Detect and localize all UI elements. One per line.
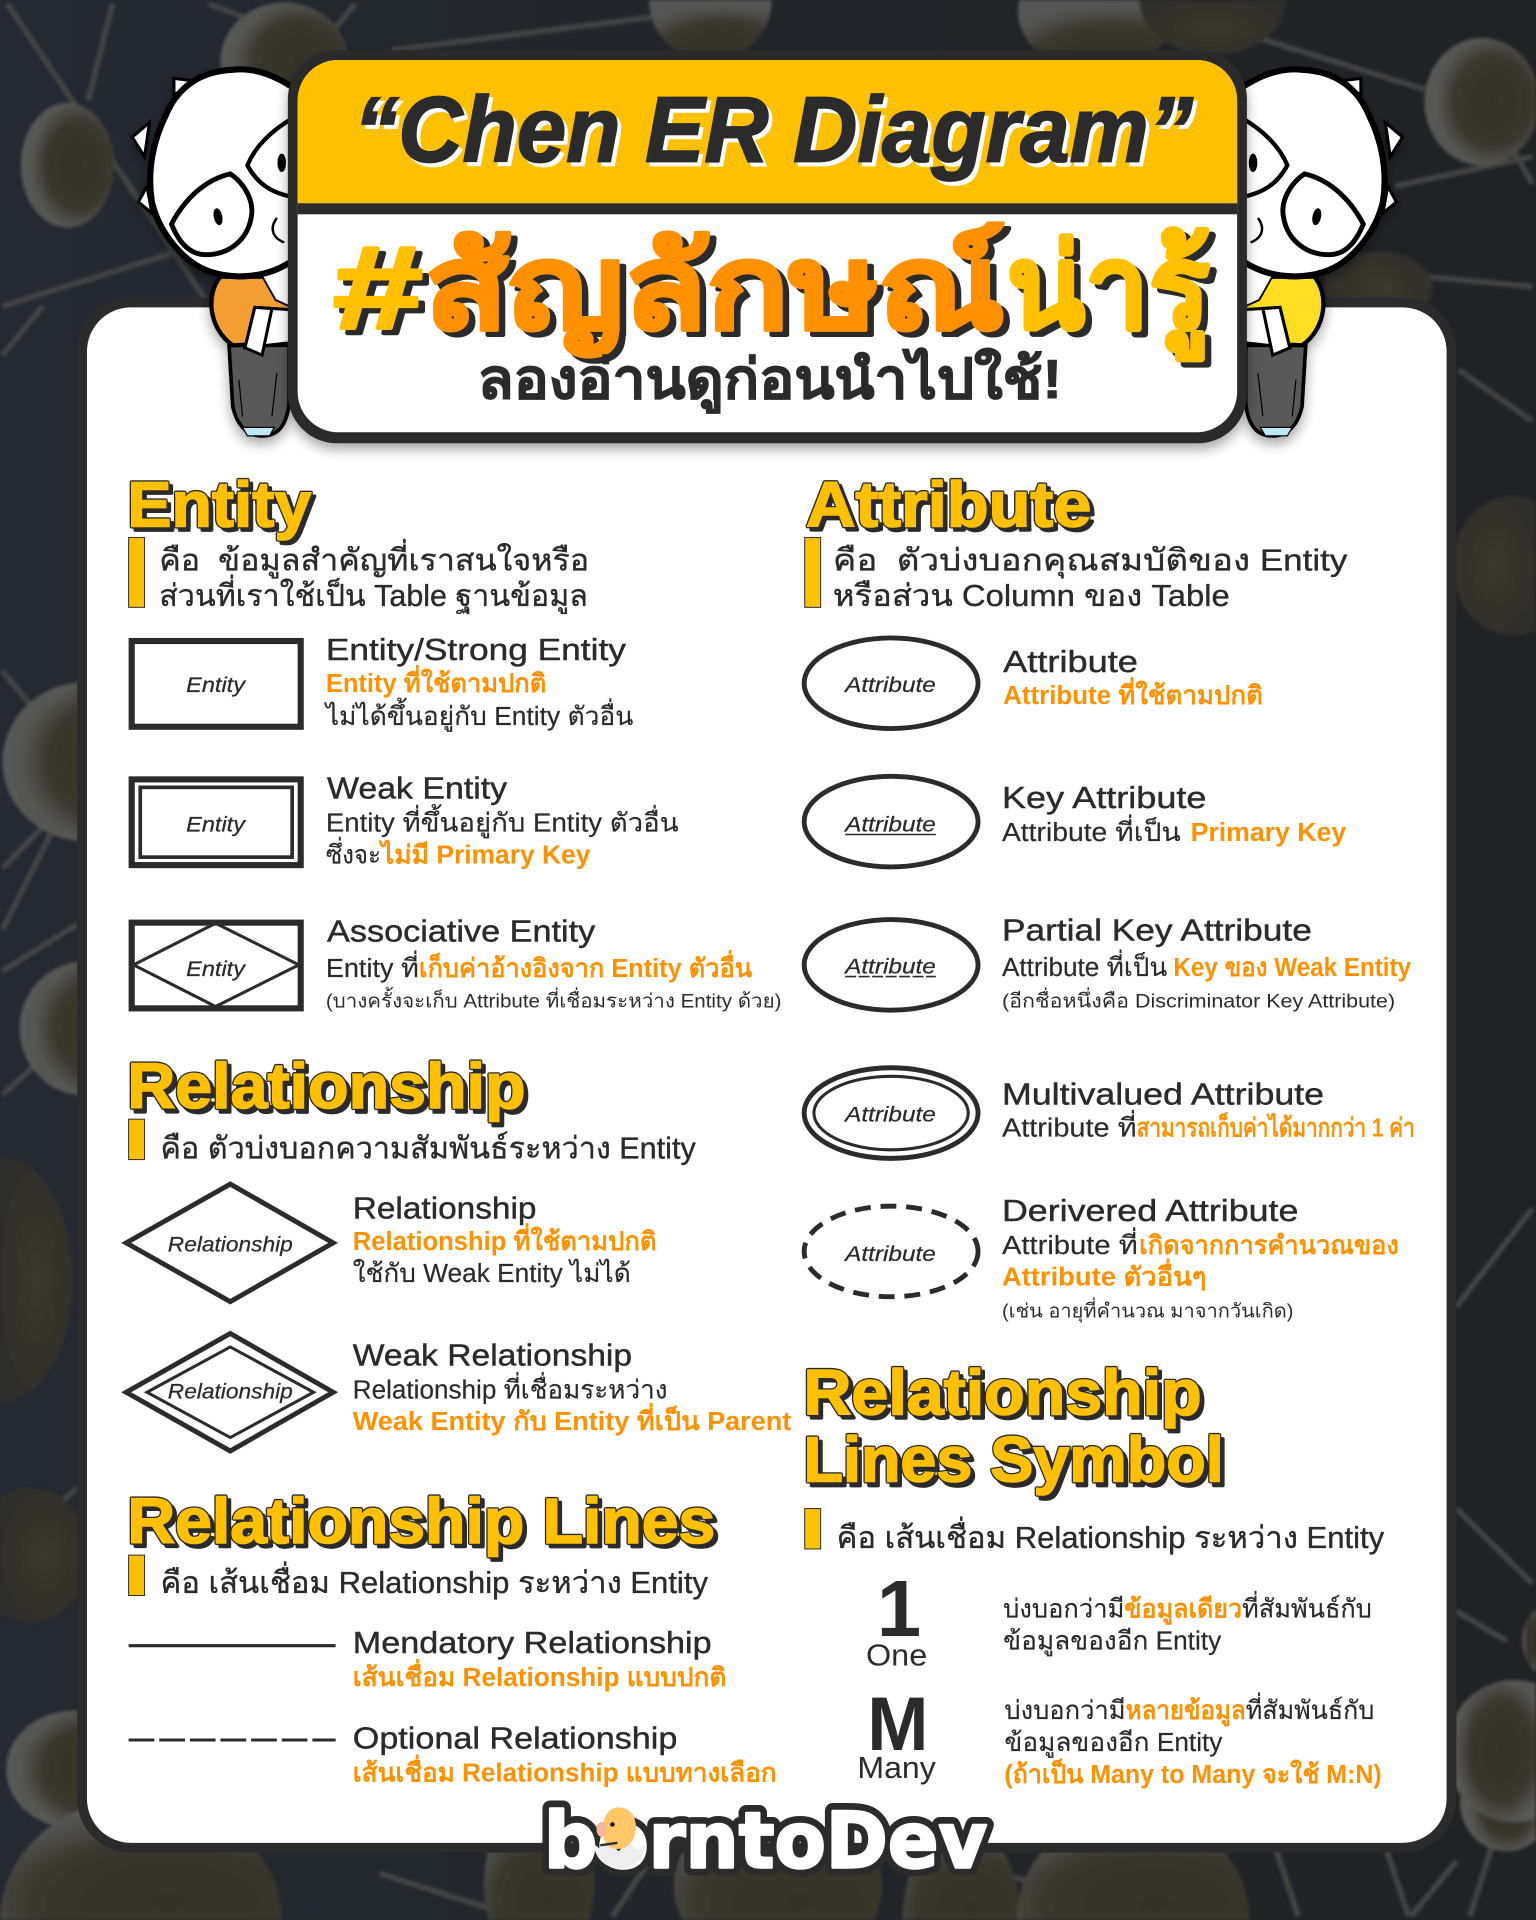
panel: Relationship: [126, 1051, 792, 1451]
accent bar: [129, 1555, 145, 1596]
Associative entity text: [326, 915, 781, 1013]
One text: ข้อมูลของอีก Entity: [1003, 1627, 1221, 1656]
Weak relationship text: [353, 1338, 792, 1436]
heading: symbols to know: สัญลักษณ์: [431, 227, 1011, 362]
Partial key text: (อีกชื่อหนึ่งคือ Discriminator Key Attribute): [1002, 988, 1395, 1013]
Mandatory text: Mendatory Relationship: [353, 1626, 712, 1660]
symbol: one: One: [866, 1638, 927, 1672]
Relationship text: [353, 1191, 657, 1288]
heading: Relationship Lines: Relationship Lines: [131, 1490, 719, 1561]
heading: Relationship Lines: Relationship Lines: [127, 1486, 715, 1557]
Associative entity text: Entity ที่: [326, 950, 419, 983]
heading: Relationship: Relationship: [127, 1051, 525, 1122]
Optional text: Optional Relationship: [353, 1722, 677, 1756]
heading: Relationship: Relationship: [127, 1051, 525, 1122]
accent bar: [129, 538, 145, 607]
symbol: multivalued attribute double ellipse: Attribute: [843, 1104, 936, 1127]
Relationship description: คือ ตัวบ่งบอกความสัมพันธ์ระหว่าง Entity: [160, 1131, 696, 1165]
Partial key text: Attribute ที่เป็น: [1002, 949, 1167, 982]
symbol: many: Many: [857, 1751, 937, 1785]
title: Chen ER Diagram: “Chen ER Diagram”: [354, 78, 1193, 182]
Relationship text: Relationship: [353, 1191, 536, 1225]
Mandatory text: [353, 1626, 726, 1692]
Weak relationship text: Weak Relationship: [353, 1338, 632, 1372]
Many text: บ่งบอกว่ามี: [1004, 1697, 1126, 1725]
symbol: many: [857, 1682, 937, 1785]
heading: Entity: Entity: [127, 470, 312, 541]
heading: symbols to know: น่ารู้: [1007, 222, 1210, 361]
symbol: attribute ellipse: [804, 638, 978, 729]
symbol: relationship diamond: [126, 1184, 333, 1302]
Many text: ข้อมูลของอีก Entity: [1004, 1729, 1223, 1758]
panel: Entity: [127, 470, 781, 1013]
Attribute description: คือ ตัวบ่งบอกคุณสมบัติของ Entity: [833, 544, 1348, 580]
Strong entity text: Entity ที่ใช้ตามปกติ: [326, 665, 546, 698]
Key attribute text: Attribute ที่เป็น: [1002, 814, 1181, 847]
One text: [1003, 1591, 1372, 1656]
Symbol description: คือ เส้นเชื่อม Relationship ระหว่าง Entity: [837, 1516, 1385, 1555]
Relationship text: ใช้กับ Weak Entity ไม่ได้: [353, 1259, 631, 1288]
One text: ข้อมูลเดียว: [1124, 1595, 1242, 1626]
Attribute description: [833, 544, 1348, 613]
Partial key text: Partial Key Attribute: [1002, 913, 1312, 947]
Associative entity text: Associative Entity: [327, 915, 596, 949]
Many text: (ถ้าเป็น Many to Many จะใช้ M:N): [1004, 1758, 1382, 1789]
symbol: weak relationship double diamond: [126, 1333, 333, 1451]
heading: Attribute: Attribute: [810, 473, 1095, 544]
symbol: key attribute ellipse: Attribute: [843, 813, 936, 836]
symbol: derived attribute dashed ellipse: Attribute: [843, 1243, 936, 1266]
Weak relationship text: Relationship ที่เชื่อมระหว่าง: [353, 1371, 668, 1404]
icon: chick in egg: [592, 1807, 646, 1885]
Derived text: Derivered Attribute: [1002, 1194, 1298, 1228]
panel: Relationship Lines: [127, 1486, 777, 1788]
symbol: solid line: [129, 1644, 336, 1647]
Entity description: ส่วนที่เราใช้เป็น Table ฐานข้อมูล: [159, 574, 588, 614]
Many text: ที่สัมพันธ์กับ: [1246, 1692, 1374, 1725]
Relationship text: Relationship ที่ใช้ตามปกติ: [353, 1223, 657, 1256]
Optional text: [353, 1722, 777, 1788]
heading: symbols to know: น่ารู้: [1013, 227, 1216, 366]
Derived text: (เช่น อายุที่คำนวณ มาจากวันเกิด): [1002, 1298, 1293, 1324]
accent bar: [129, 1119, 145, 1160]
Key attribute text: [1002, 781, 1347, 847]
heading: Attribute: Attribute: [806, 470, 1091, 541]
Weak relationship text: Weak Entity กับ Entity ที่เป็น Parent: [353, 1403, 792, 1436]
panel: Attribute: [804, 470, 1415, 1324]
Attribute description: หรือส่วน Column ของ Table: [833, 579, 1230, 613]
heading: symbols to know: #: [339, 227, 429, 358]
Mandatory text: เส้นเชื่อม Relationship แบบปกติ: [353, 1659, 726, 1692]
heading: symbols to know: #: [333, 222, 423, 353]
heading: Entity: Entity: [131, 473, 315, 544]
Weak entity text: ไม่มี Primary Key: [378, 839, 591, 869]
heading: Relationship Lines Symbol: Relationship: [804, 1357, 1202, 1428]
panel: title header: [288, 50, 1247, 443]
Derived text: [1002, 1194, 1399, 1324]
symbol: strong entity rectangle: [132, 641, 301, 727]
symbol: attribute ellipse: Attribute: [843, 674, 936, 697]
symbol: weak entity double rectangle: Entity: [186, 813, 247, 836]
Multivalued text: สามารถเก็บค่าได้มากกว่า 1 ค่า: [1137, 1111, 1415, 1142]
One text: ที่สัมพันธ์กับ: [1242, 1591, 1372, 1624]
Associative entity text: (บางครั้งจะเก็บ Attribute ที่เชื่อมระหว่าง Entity ด้วย): [326, 987, 781, 1013]
symbol: derived attribute dashed ellipse: [804, 1206, 978, 1297]
panel: Relationship Lines Symbol: [804, 1357, 1385, 1789]
heading: Relationship Lines Symbol: Relationship: [807, 1361, 1205, 1432]
subtitle: ลองอ่านดูก่อนนำไปใช้!: [478, 347, 1062, 414]
Weak entity text: [326, 771, 679, 869]
Derived text: Attribute ตัวอื่นๆ: [1002, 1259, 1207, 1292]
symbol: associative entity: [132, 923, 301, 1008]
Derived text: เกิดจากการคำนวณของ: [1139, 1232, 1399, 1260]
heading: Attribute: Attribute: [806, 470, 1091, 541]
Weak entity text: Weak Entity: [327, 771, 508, 805]
logo: borntoDev: borntoDev: [544, 1796, 987, 1886]
Partial key text: Key ของ Weak Entity: [1173, 954, 1412, 982]
symbol: partial key attribute ellipse: [804, 920, 978, 1010]
One text: บ่งบอกว่ามี: [1003, 1596, 1124, 1624]
Many text: [1004, 1692, 1382, 1789]
heading: symbols to know: สัญลักษณ์: [425, 222, 1004, 357]
Associative entity text: เก็บค่าอ้างอิงจาก Entity ตัวอื่น: [419, 950, 752, 983]
symbol: weak entity double rectangle: [132, 779, 301, 865]
Attribute text: Attribute: [1003, 645, 1138, 679]
heading: Relationship Lines Symbol: [804, 1357, 1227, 1499]
accent bar: [805, 1509, 821, 1549]
Weak entity text: Entity ที่ขึ้นอยู่กับ Entity ตัวอื่น: [326, 804, 679, 838]
Entity description: คือ ข้อมูลสำคัญที่เราสนใจหรือ: [159, 539, 589, 579]
heading: symbols to know: [333, 222, 1216, 366]
Multivalued text: Multivalued Attribute: [1002, 1077, 1324, 1111]
symbol: one: [866, 1564, 927, 1672]
symbol: multivalued attribute double ellipse: [804, 1068, 978, 1158]
symbol: dashed line: [129, 1739, 336, 1741]
Many text: หลายข้อมูล: [1126, 1697, 1246, 1727]
symbol: partial key attribute ellipse: Attribute: [843, 955, 936, 978]
heading: Relationship Lines: Relationship Lines: [127, 1486, 715, 1557]
heading: Relationship: Relationship: [131, 1055, 529, 1126]
heading: Relationship Lines Symbol: Relationship: [804, 1357, 1202, 1428]
heading: Relationship Lines Symbol: Lines Symbol: [804, 1425, 1224, 1496]
Lines description: คือ เส้นเชื่อม Relationship ระหว่าง Entity: [160, 1561, 709, 1600]
Entity description: [159, 539, 589, 614]
accent bar: [805, 538, 821, 607]
Multivalued text: Attribute ที่: [1002, 1109, 1137, 1142]
mascot: right character peeking: [1233, 69, 1402, 436]
Strong entity text: Entity/Strong Entity: [326, 633, 627, 667]
Optional text: เส้นเชื่อม Relationship แบบทางเลือก: [353, 1755, 777, 1788]
Partial key text: [1002, 913, 1412, 1013]
symbol: weak relationship double diamond: Relationship: [168, 1380, 293, 1403]
heading: Entity: Entity: [127, 470, 312, 541]
heading: Relationship Lines Symbol: Lines Symbol: [807, 1428, 1227, 1499]
Key attribute text: Primary Key: [1191, 819, 1347, 847]
symbol: key attribute ellipse: [804, 776, 978, 867]
main white card: [77, 298, 1456, 1853]
Attribute text: Attribute ที่ใช้ตามปกติ: [1003, 677, 1263, 710]
Strong entity text: [324, 633, 633, 732]
symbol: associative entity: Entity: [186, 958, 247, 981]
heading: Relationship Lines Symbol: Lines Symbol: [804, 1425, 1224, 1496]
symbol: strong entity rectangle: Entity: [186, 674, 247, 697]
symbol: relationship diamond: Relationship: [168, 1233, 293, 1256]
Multivalued text: [1002, 1077, 1415, 1142]
Weak entity text: ซึ่งจะ: [326, 836, 381, 869]
title: Chen ER Diagram: “Chen ER Diagram”: [358, 81, 1197, 185]
Derived text: Attribute ที่: [1002, 1227, 1138, 1260]
Key attribute text: Key Attribute: [1002, 781, 1207, 815]
logo: borntoDev: borntoDev: [544, 1796, 987, 1886]
Strong entity text: ไม่ได้ขึ้นอยู่กับ Entity ตัวอื่น: [324, 698, 633, 732]
mascot: left character peeking: [132, 69, 301, 436]
Attribute text: [1003, 645, 1263, 710]
symbol: one: 1: [877, 1564, 921, 1653]
symbol: many: M: [867, 1682, 928, 1767]
